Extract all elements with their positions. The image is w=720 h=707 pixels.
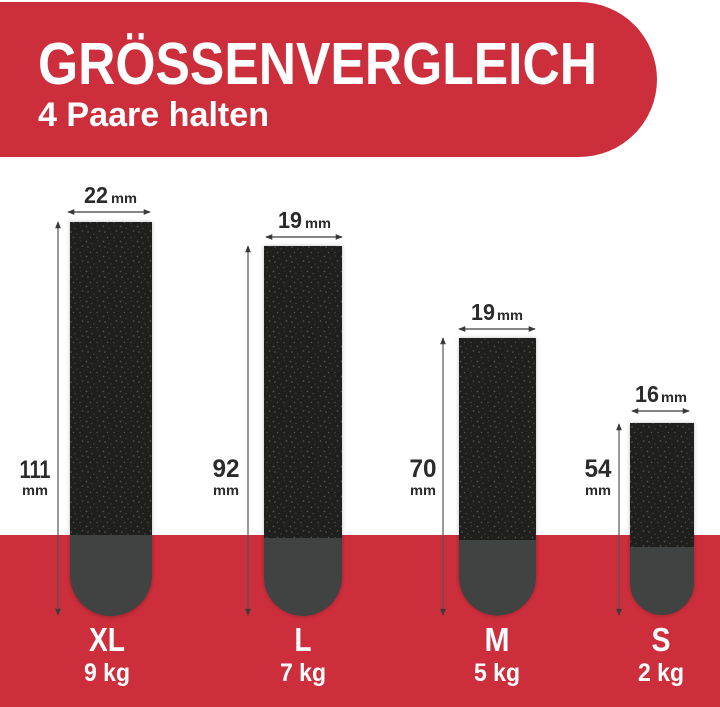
L height dimension: 92 — [212, 455, 240, 483]
XL height dimension: mm — [22, 482, 48, 498]
M width dimension: 19 — [471, 299, 495, 325]
M strip — [459, 338, 536, 616]
subtitle: 4 Paare halten — [38, 96, 269, 134]
M height dimension: mm — [410, 482, 436, 498]
M width dimension: mm — [497, 307, 523, 323]
S height dimension — [584, 424, 619, 615]
size M group — [410, 299, 536, 687]
size S group — [584, 381, 694, 687]
L height dimension: mm — [213, 482, 239, 498]
XL strip — [70, 222, 152, 617]
S weight: 2 kg — [638, 659, 684, 687]
size XL group — [20, 182, 152, 687]
M height dimension — [410, 338, 443, 615]
L strip — [264, 246, 342, 616]
S strip — [630, 423, 694, 615]
L width dimension: mm — [305, 215, 331, 231]
S height dimension: 54 — [584, 455, 612, 483]
L weight: 7 kg — [280, 659, 326, 687]
title: GRÖSSENVERGLEICH — [38, 31, 597, 97]
XL width dimension — [68, 182, 150, 212]
bottom red band — [0, 535, 720, 707]
XL height dimension — [20, 222, 58, 615]
L width dimension: 19 — [278, 207, 302, 233]
L width dimension — [266, 207, 342, 237]
L height dimension — [212, 246, 248, 615]
header banner — [0, 2, 657, 157]
XL height dimension: 111 — [20, 456, 51, 484]
XL weight: 9 kg — [84, 659, 130, 687]
S width dimension: 16 — [635, 381, 659, 407]
L label: L — [294, 621, 312, 658]
XL width dimension: mm — [111, 190, 137, 206]
size L group — [212, 207, 342, 687]
S label: S — [652, 621, 670, 658]
S height dimension: mm — [585, 482, 611, 498]
M height dimension: 70 — [410, 455, 436, 483]
XL width dimension: 22 — [84, 182, 108, 208]
S width dimension: mm — [661, 389, 687, 405]
M label: M — [484, 621, 510, 658]
M weight: 5 kg — [474, 659, 520, 687]
XL label: XL — [89, 621, 125, 658]
M width dimension — [459, 299, 535, 329]
S width dimension — [632, 381, 689, 411]
